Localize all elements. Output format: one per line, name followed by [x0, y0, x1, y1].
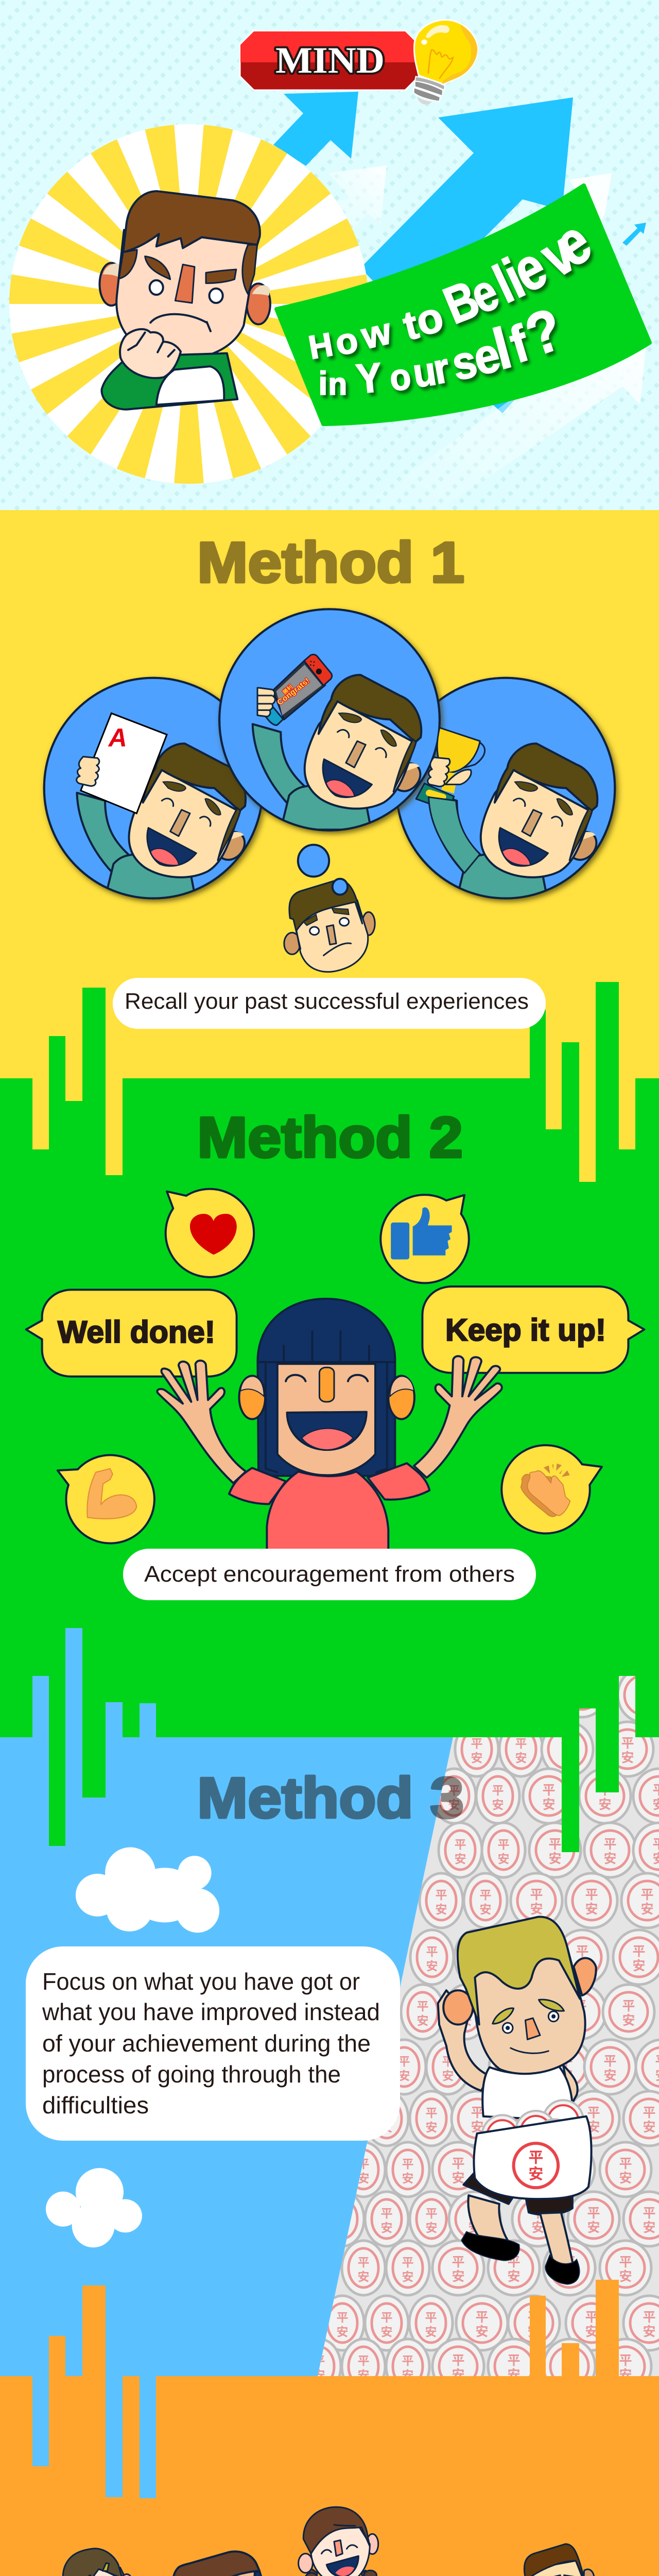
- bubble text: Well done!: [58, 1315, 215, 1349]
- caption: method 2: [123, 1549, 536, 1600]
- icon: game console: Congrats!: [275, 676, 311, 707]
- icon: game console: 勝利: [282, 684, 294, 696]
- panel: cover: [9, 20, 650, 507]
- title text: v: [529, 216, 587, 293]
- circle: exam paper memory: [44, 678, 263, 899]
- cloud: upper: [76, 1848, 219, 1933]
- thought bubbles: [298, 845, 329, 877]
- cheering girl: [157, 1299, 502, 1550]
- title text: l: [487, 315, 518, 382]
- icon: trophy: [416, 727, 485, 873]
- caption: method 2: Accept encouragement from others: [144, 1562, 515, 1587]
- title text: [303, 203, 605, 414]
- title text: u: [406, 346, 442, 398]
- title text: w: [357, 310, 396, 358]
- title text: i: [318, 365, 327, 402]
- man collecting coins: 安: [528, 2166, 543, 2183]
- title text: ?: [517, 294, 571, 370]
- speech bubble: clapping hands: [501, 1445, 602, 1533]
- title text: o: [411, 293, 448, 346]
- heading: Method 3: Method 3: [197, 1766, 464, 1830]
- speech bubble: muscle: [58, 1455, 154, 1544]
- man collecting coins: [438, 1917, 596, 2284]
- title text: Y: [349, 351, 390, 406]
- MIND badge: [240, 31, 420, 90]
- text card: Focus on what you have got or: [42, 1968, 360, 1995]
- title text: H: [305, 325, 336, 367]
- title text: n: [328, 367, 347, 401]
- circle: game console memory: [219, 609, 440, 831]
- title text: e: [469, 327, 505, 386]
- speech bubble: thumbs up: [380, 1195, 469, 1283]
- decorative arrows: [273, 92, 647, 507]
- speech bubble: heart: [166, 1189, 254, 1277]
- heading: Method 2: Method 2: [197, 1106, 463, 1170]
- title text: o: [332, 319, 361, 363]
- speech bubble: Keep it up: [422, 1286, 644, 1373]
- title text: o: [383, 352, 418, 401]
- text card: what you have improved instead: [42, 1998, 380, 2025]
- speech bubble: Well done: [26, 1290, 237, 1377]
- thinking man: [99, 191, 270, 410]
- girl with braids: [292, 2507, 381, 2576]
- sunburst circle: [9, 124, 369, 484]
- title text: B: [433, 268, 490, 337]
- caption: method 1: [113, 978, 546, 1029]
- bubble text: Keep it up!: [445, 1313, 606, 1347]
- man collecting coins: 平: [528, 2149, 543, 2166]
- title text: r: [427, 343, 455, 394]
- title text: i: [494, 246, 533, 310]
- title text: e: [502, 232, 557, 306]
- title text: l: [484, 253, 522, 315]
- title text: t: [398, 301, 423, 349]
- title text: f: [503, 313, 536, 375]
- text card: difficulties: [42, 2092, 149, 2119]
- worried man head: [284, 879, 375, 972]
- circle: exam paper memory: A: [108, 723, 127, 752]
- panel: closing message: [55, 2507, 597, 2576]
- text card: process of going through the: [42, 2061, 341, 2088]
- text card: of your achievement during the: [42, 2030, 371, 2057]
- caption: method 1: Recall your past successful experiences: [125, 989, 529, 1014]
- title banner: [276, 185, 650, 424]
- girl with apron: [55, 2549, 135, 2576]
- MIND badge: MIND: [275, 40, 385, 81]
- title text: e: [541, 203, 604, 284]
- panel: method 2: [26, 1106, 644, 1600]
- panel: method 3: [26, 1766, 596, 2284]
- panel: method 1: [44, 531, 615, 1029]
- circle: trophy memory: [396, 678, 615, 899]
- heading: Method 1: Method 1: [197, 531, 464, 595]
- icon: game console: [257, 654, 332, 725]
- boy laughing: [518, 2544, 597, 2576]
- memory circles: [44, 609, 615, 972]
- text card: [26, 1946, 400, 2141]
- title text: s: [446, 335, 482, 391]
- father laughing: [151, 2551, 294, 2576]
- title text: e: [461, 262, 508, 325]
- cloud: lower: [46, 2168, 142, 2247]
- icon: light bulb: [413, 20, 477, 105]
